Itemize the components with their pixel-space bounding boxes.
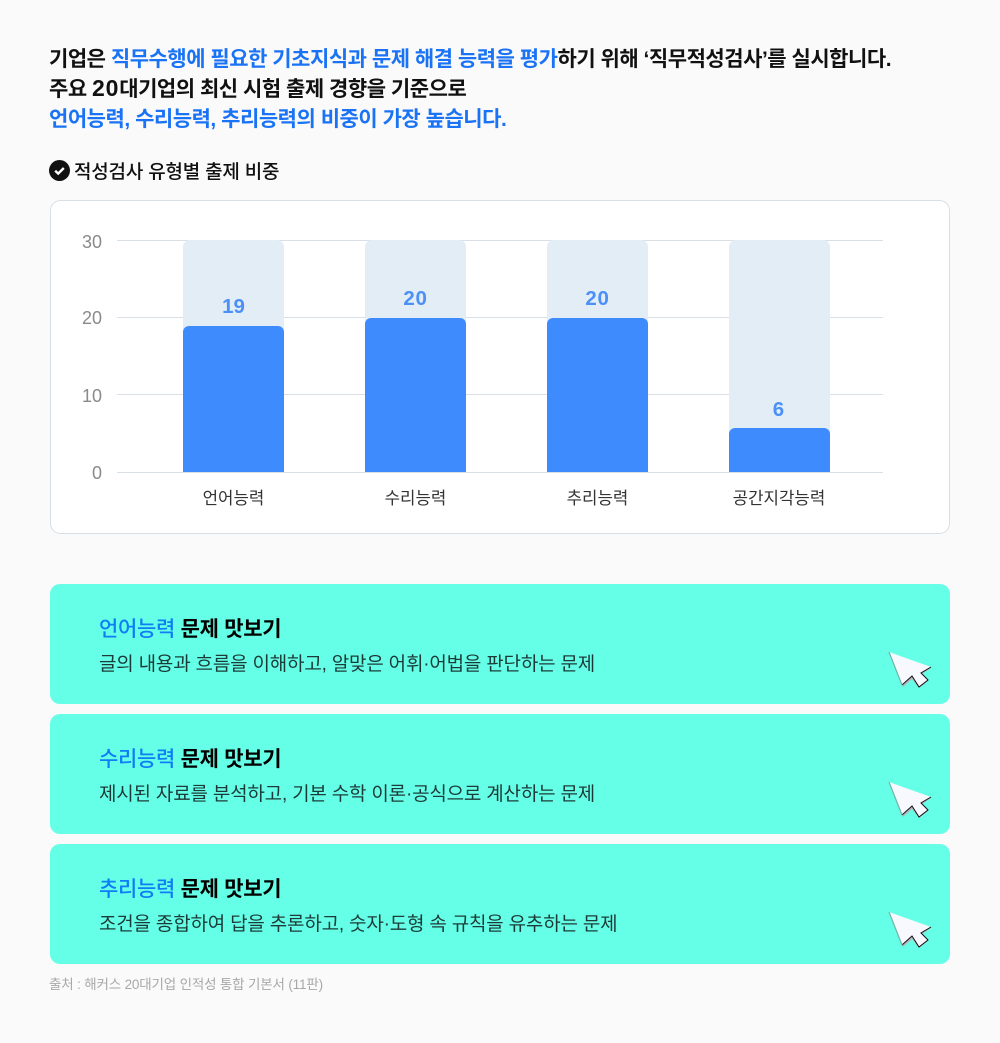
y axis labels: 20 [82,308,102,328]
y axis labels: 30 [82,232,102,252]
icon: check badge [49,160,70,181]
icon: cursor arrow [888,652,932,688]
panel: 수리능력 card [50,714,950,834]
bar: 추리능력: 추리능력 [567,489,628,508]
bar: 수리능력: 수리능력 [385,489,446,508]
bar: 추리능력: 20 [585,287,610,310]
bar: 공간지각능력: 6 [773,398,784,421]
y axis labels: 10 [82,386,102,406]
source note: 출처 : 해커스 20대기업 인적성 통합 기본서 (11판) [49,977,323,992]
bar: 언어능력 [183,240,284,508]
card description: 글의 내용과 흐름을 이해하고, 알맞은 어휘·어법을 판단하는 문제 [99,654,595,675]
y axis labels [82,232,102,483]
bar: 공간지각능력 [729,240,830,508]
bar: 언어능력: 19 [222,295,245,318]
intro text: 기업은 직무수행에 필요한 기초지식과 문제 해결 능력을 평가하기 위해 ‘직무적성검사’를 실시합니다. [49,48,891,71]
card description: 제시된 자료를 분석하고, 기본 수학 이론·공식으로 계산하는 문제 [99,784,595,805]
bar: 언어능력: 언어능력 [203,489,264,508]
y axis labels: 0 [92,463,102,483]
card heading: 수리능력 문제 맛보기 [99,748,281,771]
panel: 추리능력 card [50,844,950,964]
panel: bar chart [50,200,950,534]
intro text: 주요 20대기업의 최신 시험 출제 경향을 기준으로 [49,75,466,101]
bar: 수리능력 [365,240,466,508]
icon: cursor arrow [888,912,932,948]
bar: 추리능력 [547,240,648,508]
chart heading: 적성검사 유형별 출제 비중 [74,162,279,183]
panel: 언어능력 card [50,584,950,704]
icon: cursor arrow [888,782,932,818]
intro text: 언어능력, 수리능력, 추리능력의 비중이 가장 높습니다. [49,108,506,131]
card description: 조건을 종합하여 답을 추론하고, 숫자·도형 속 규칙을 유추하는 문제 [99,914,617,935]
card heading: 언어능력 문제 맛보기 [99,618,281,641]
bar: 공간지각능력: 공간지각능력 [733,489,825,508]
bar: 수리능력: 20 [403,287,428,310]
card heading: 추리능력 문제 맛보기 [99,878,281,901]
intro text [49,48,891,131]
